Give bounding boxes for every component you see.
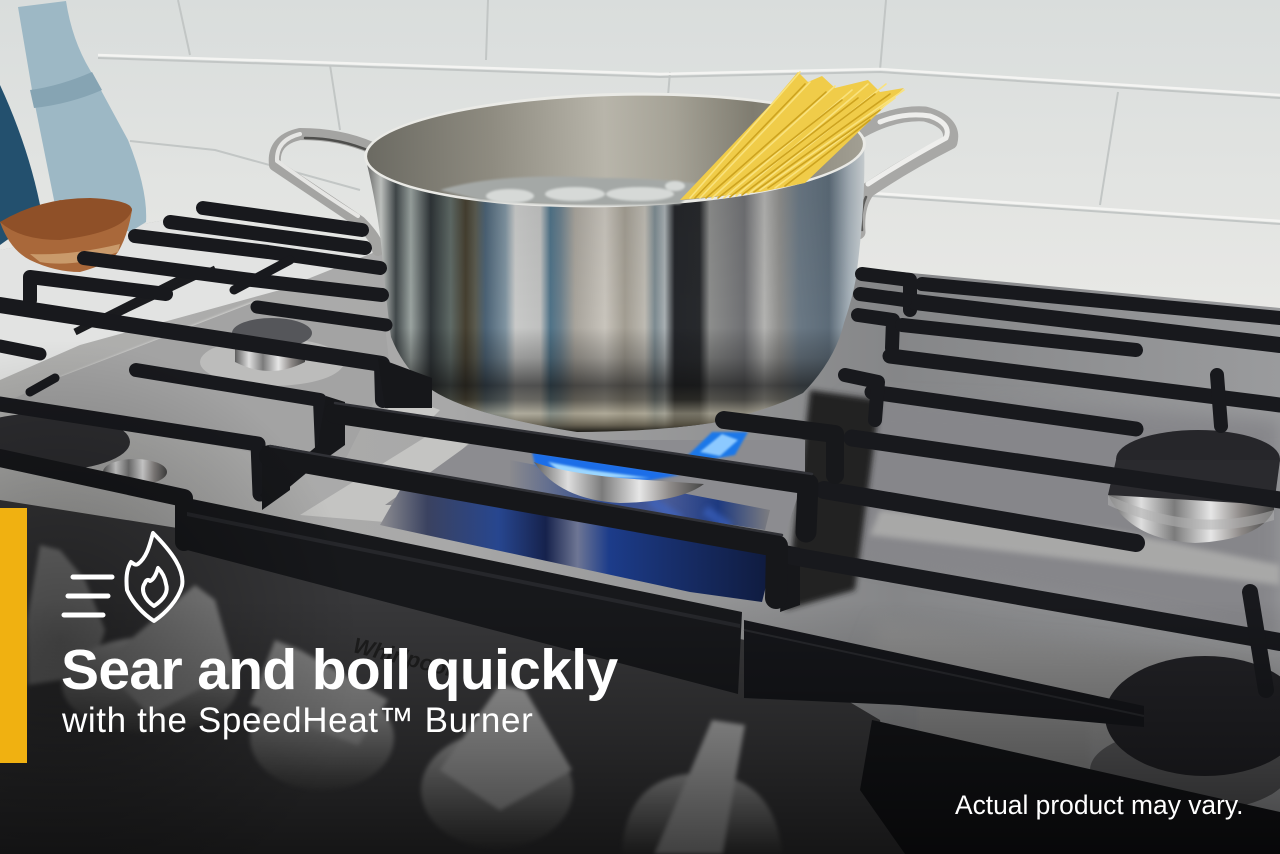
grates: back left	[0, 208, 386, 494]
grates: front thick bar	[187, 498, 1280, 854]
stock pot	[275, 86, 951, 432]
grates: right	[792, 274, 1280, 690]
grates: left support blocks	[260, 358, 800, 612]
accent bar	[0, 508, 27, 763]
burner: blue flame under pot	[532, 432, 748, 503]
pot handle left	[275, 134, 378, 250]
boiling water	[440, 176, 700, 205]
disclaimer: Actual product may vary.	[955, 790, 1243, 820]
spaghetti	[680, 72, 904, 200]
stainless cooktop surface	[0, 220, 1280, 854]
brand mark on panel: Whirlpool	[351, 633, 456, 682]
burners: caps and rings	[0, 318, 1280, 812]
control panel knobs	[27, 545, 782, 854]
pot handle right	[858, 114, 951, 232]
subtitle: with the SpeedHeat™ Burner	[62, 701, 533, 740]
tiled wall	[0, 0, 1280, 330]
icon: speed flame	[62, 530, 184, 623]
dark photo overlay	[0, 340, 1280, 854]
grates: front centre	[0, 403, 835, 598]
pepper mills and wooden bowl	[0, 1, 146, 272]
burner: window steel with blue reflections	[380, 440, 805, 602]
pot rim and interior	[363, 86, 867, 214]
title: Sear and boil quickly	[61, 638, 618, 702]
pot body	[366, 140, 864, 432]
